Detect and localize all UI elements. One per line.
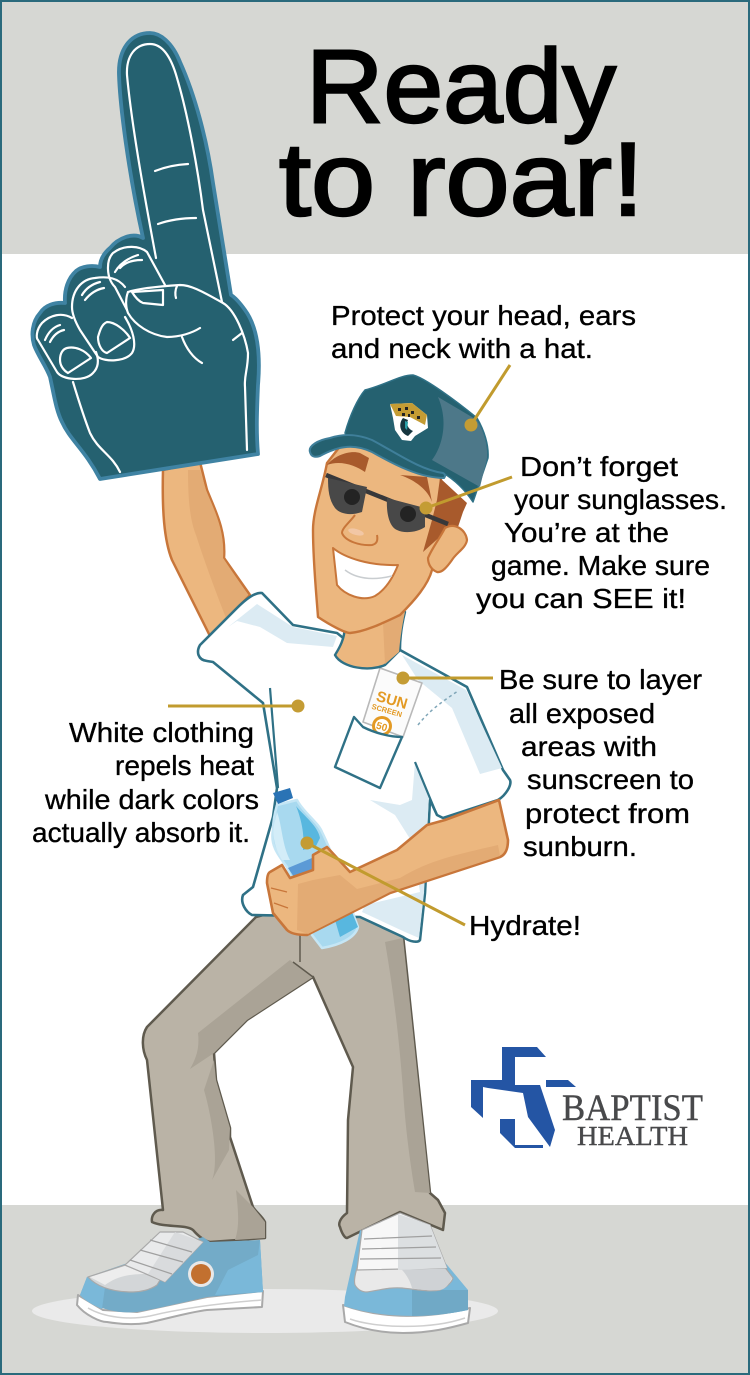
sunscreen tube: [363, 668, 422, 737]
callout line: hydrate: [300, 836, 465, 925]
left shoe eyelet: [188, 1261, 214, 1287]
jaguars logo: [390, 403, 428, 441]
text: sunscreen tip: protect from: [525, 798, 690, 829]
text: hat tip: [331, 300, 636, 364]
character: hair: [327, 452, 467, 552]
text: clothing tip: repels heat: [115, 750, 254, 781]
shirt pocket: [335, 717, 402, 788]
foam finger: [32, 33, 259, 479]
foam finger white outline: [37, 44, 248, 472]
nose: [342, 515, 377, 545]
title: [279, 29, 644, 238]
Baptist Health logo: [471, 1047, 703, 1151]
callout line: white clothing: [168, 700, 304, 712]
water bottle: [272, 788, 358, 948]
text: hat tip: and neck with a hat.: [331, 333, 593, 364]
left shoe toe cap: [88, 1265, 160, 1292]
right shoe toe cap: [354, 1265, 453, 1292]
character: raised arm: [163, 462, 250, 636]
title: Ready: [306, 29, 616, 145]
text: clothing tip: while dark colors: [44, 784, 259, 815]
sunscreen tube: SCREEN: [371, 702, 403, 719]
callout line: sunscreen: [396, 672, 493, 684]
text: clothing tip: White clothing: [69, 717, 254, 748]
sunscreen tube: SUN: [374, 688, 409, 713]
floor shadow: [32, 1289, 498, 1333]
character: cap: [310, 375, 488, 502]
text: clothing tip: [32, 717, 259, 848]
text: sunscreen tip: [499, 664, 702, 862]
smile: [333, 548, 398, 598]
left shoe laces: [125, 1232, 203, 1282]
top band: [0, 0, 750, 254]
trouser shading: [190, 938, 430, 1240]
text: sunglasses tip: You’re at the: [504, 517, 669, 548]
logo mark: [471, 1047, 576, 1148]
text: sunscreen tip: sunburn.: [523, 831, 637, 862]
right shoe laces: [357, 1213, 447, 1270]
title: to roar!: [279, 122, 644, 238]
logo wordmark: [562, 1088, 703, 1151]
character: left shoe: [77, 1232, 263, 1324]
character: shirt: [198, 593, 510, 942]
sunglasses: [326, 475, 448, 532]
sunscreen tube: 50: [375, 721, 389, 734]
character: trousers: [143, 905, 445, 1242]
text: sunglasses tip: Don’t forget: [520, 451, 678, 482]
character: forearm and hand: [267, 800, 508, 935]
text: hat tip: Protect your head, ears: [331, 300, 636, 331]
character: neck: [335, 612, 405, 668]
text: sunscreen tip: areas with: [521, 731, 657, 762]
character: face: [313, 440, 445, 633]
floor band: [0, 1205, 750, 1375]
character: ear: [428, 526, 467, 572]
callout line: hat: [464, 365, 510, 432]
text: sunscreen tip: sunscreen to: [527, 764, 694, 795]
logo wordmark: BAPTIST: [562, 1088, 703, 1129]
text: sunglasses tip: your sunglasses.: [514, 484, 727, 515]
text: sunglasses tip: you can SEE it!: [476, 583, 686, 614]
shirt shading: [228, 604, 502, 938]
callout line: sunglasses: [420, 477, 512, 514]
text: sunglasses tip: [476, 451, 727, 614]
bottle cap: [273, 788, 293, 804]
character: right shoe: [343, 1213, 470, 1333]
text: sunscreen tip: all exposed: [509, 698, 655, 729]
text: sunglasses tip: game. Make sure: [491, 550, 710, 581]
text: sunscreen tip: Be sure to layer: [499, 664, 702, 695]
text: hydrate tip: Hydrate!: [469, 910, 581, 941]
text: clothing tip: actually absorb it.: [32, 817, 250, 848]
logo wordmark: HEALTH: [577, 1121, 688, 1151]
eyebrow: [327, 452, 369, 472]
